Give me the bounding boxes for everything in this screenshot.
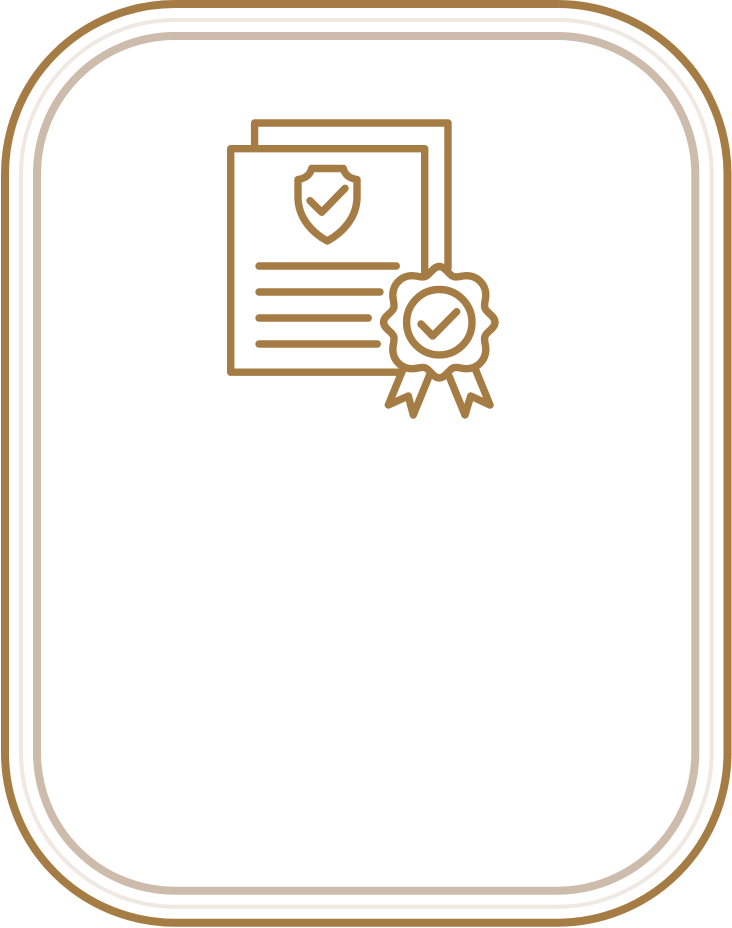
icon: left ribbon bbox=[388, 370, 430, 415]
icon: right ribbon bbox=[449, 368, 490, 415]
document text lines bbox=[259, 266, 396, 344]
icon: shield with check bbox=[298, 168, 357, 241]
icon: front page bbox=[231, 149, 425, 372]
icon: back page bbox=[255, 123, 448, 268]
icon: rosette seal bbox=[384, 266, 495, 378]
icon: certificate with badge bbox=[231, 123, 495, 415]
